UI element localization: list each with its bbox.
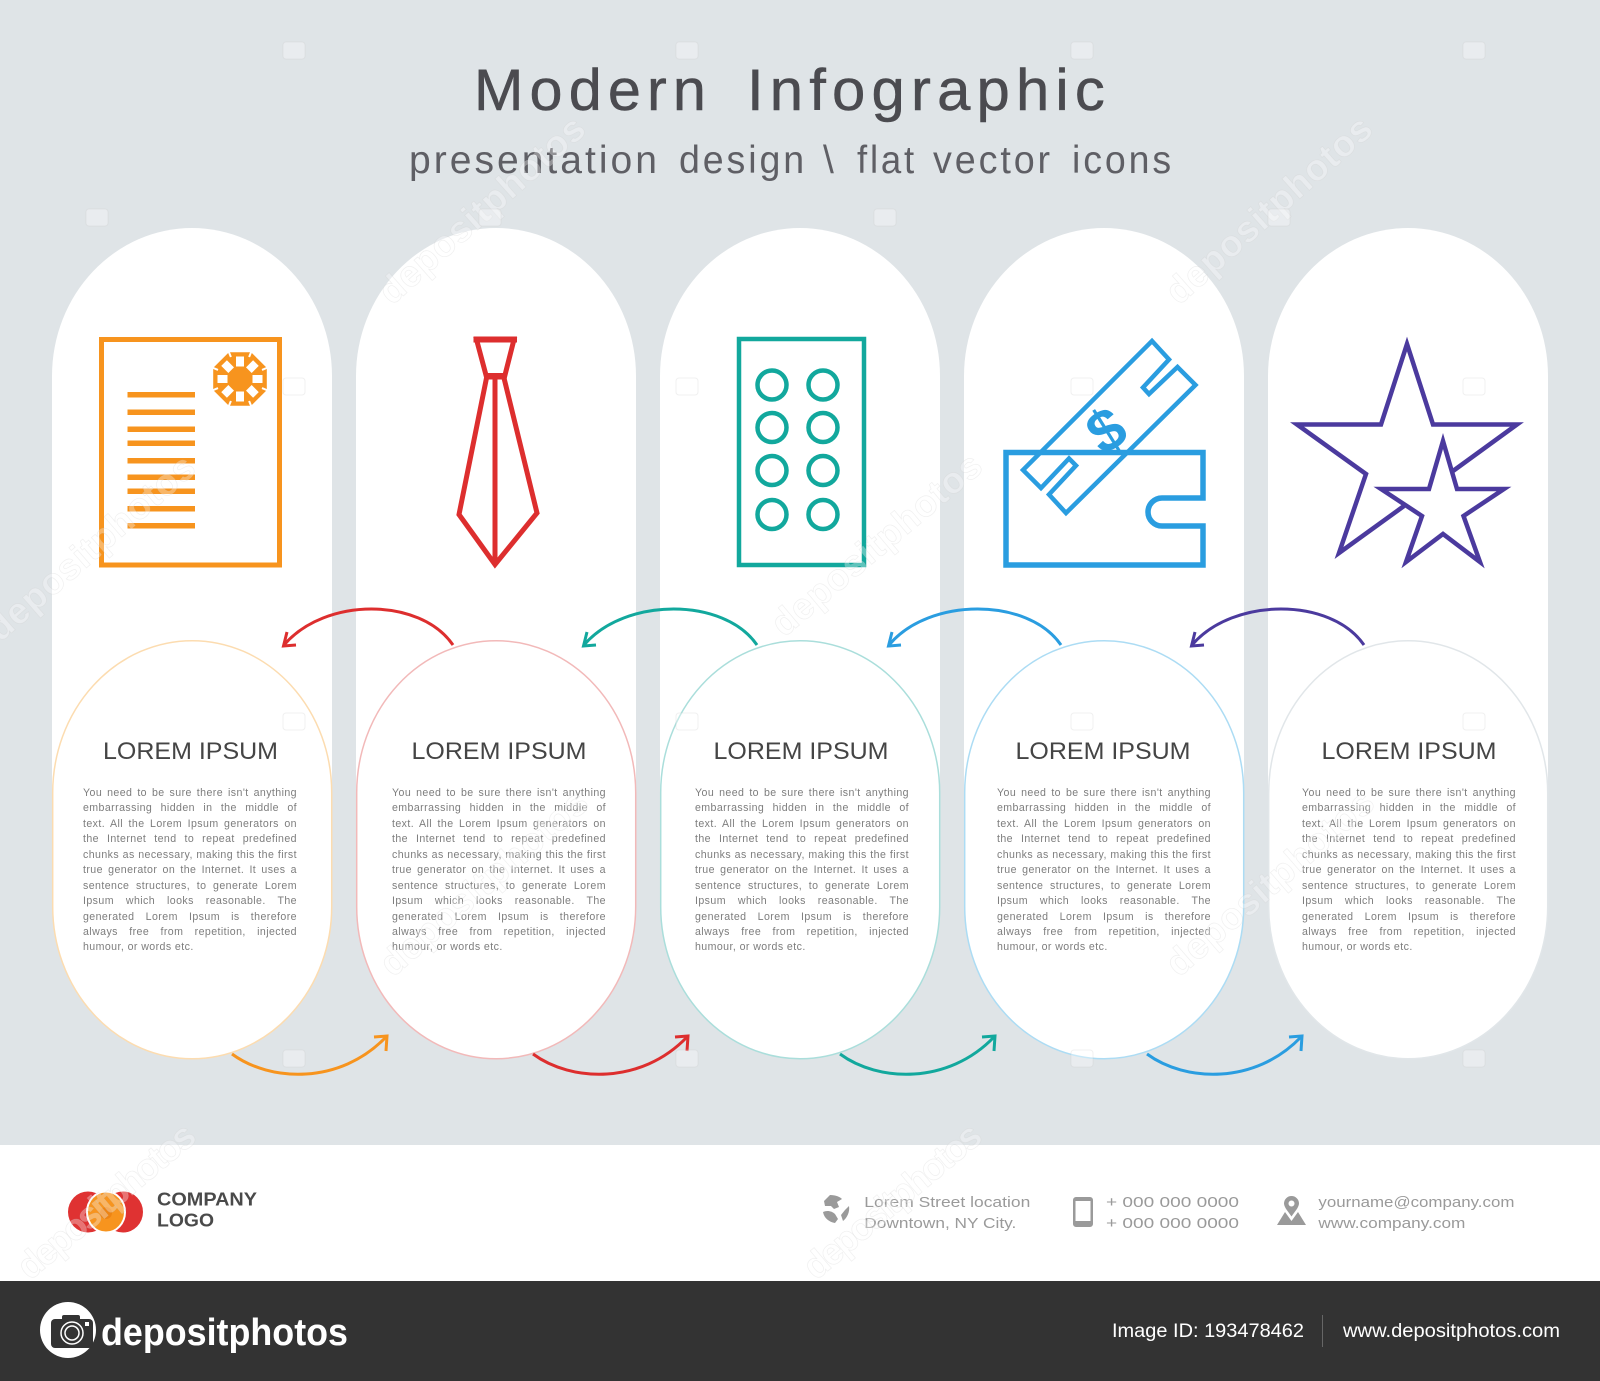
icon: globe [823, 1195, 849, 1223]
heading: column 4: LOREM IPSUM [1016, 738, 1190, 765]
text: column 1: humour, or words etc. [83, 941, 194, 953]
title: Modern [474, 58, 712, 123]
icon: camera logo [40, 1302, 96, 1358]
panel: column 4 [964, 228, 1244, 1059]
arrow: teal back [584, 609, 757, 646]
icon: map pin [1277, 1196, 1306, 1225]
arrow: blue forward [1147, 1036, 1302, 1074]
icon: document with seal [102, 340, 280, 565]
heading: column 1: LOREM IPSUM [103, 738, 278, 765]
text: column 5: generated Lorem Ipsum is therefore [1302, 910, 1516, 922]
text: column 1: generated Lorem Ipsum is therefore [83, 910, 297, 922]
title: Infographic [747, 58, 1111, 123]
text: column 2 [392, 786, 606, 961]
arrow: teal forward [840, 1036, 995, 1074]
text: column 4: generated Lorem Ipsum is therefore [997, 910, 1211, 922]
icon: wallet with banknote [1006, 341, 1203, 565]
text: column 4: You need to be sure there isn't anything [997, 787, 1211, 799]
text: column 2: You need to be sure there isn't anything [392, 787, 606, 799]
heading: column 5: LOREM IPSUM [1322, 738, 1496, 765]
text: column 3: sentence structures, to generate Lorem [695, 880, 909, 892]
address: Lorem Street location [864, 1194, 1030, 1211]
text: column 1: Ipsum which looks reasonable. The [83, 895, 297, 907]
text: column 4: text. All the Lorem Ipsum generators on [997, 818, 1211, 830]
text: column 4: sentence structures, to generate Lorem [997, 880, 1211, 892]
text: depositphotos [795, 1114, 990, 1287]
text: column 3: chunks as necessary, making this the first [695, 849, 909, 861]
arrow: red back [284, 609, 453, 646]
contact [1277, 1194, 1514, 1232]
text: column 1: embarrassing hidden in the middle of [83, 802, 297, 814]
arrow: orange forward [232, 1036, 387, 1074]
image id: Image ID: 193478462 [1112, 1320, 1304, 1342]
panel: column 5 [1268, 228, 1548, 1059]
bottom brand bar [0, 1281, 1600, 1381]
text: column 5: Ipsum which looks reasonable. The [1302, 895, 1516, 907]
panel: column 1 [52, 228, 332, 1059]
phone: + 000 000 0000 [1106, 1194, 1239, 1211]
subtitle: flat [857, 139, 917, 182]
icon: two stars [1297, 344, 1517, 562]
text: depositphotos [371, 781, 596, 984]
text: column 5: always free from repetition, injected [1302, 926, 1516, 938]
subtitle: design [679, 139, 807, 182]
subtitle: vector [933, 139, 1053, 182]
text: column 2: humour, or words etc. [392, 941, 503, 953]
company logo: COMPANY [157, 1190, 257, 1210]
text: column 1: always free from repetition, injected [83, 926, 297, 938]
text: column 5: chunks as necessary, making this the first [1302, 849, 1516, 861]
text: depositphotos [9, 1114, 204, 1287]
text: column 5: the Internet tend to repeat predefined [1302, 833, 1516, 845]
text: column 5: humour, or words etc. [1302, 941, 1413, 953]
text: depositphotos [370, 107, 593, 312]
icon: necktie [459, 340, 537, 564]
text: depositphotos [1157, 107, 1380, 312]
icon: pill blister pack [739, 339, 864, 565]
text: column 3 [695, 786, 909, 961]
phone [1073, 1194, 1239, 1232]
subtitle: icons [1072, 139, 1174, 182]
panel: column 3 [660, 228, 940, 1059]
text: column 4: Ipsum which looks reasonable. The [997, 895, 1211, 907]
text: column 3: generated Lorem Ipsum is therefore [695, 910, 909, 922]
text: column 3: embarrassing hidden in the middle of [695, 802, 909, 814]
text: column 1: the Internet tend to repeat predefined [83, 833, 297, 845]
subtitle: presentation [409, 139, 660, 182]
text: column 3: Ipsum which looks reasonable. The [695, 895, 909, 907]
text: column 4: true generator on the Internet. It uses a [997, 864, 1211, 876]
company logo: LOGO [157, 1211, 214, 1231]
contact: www.company.com [1317, 1215, 1465, 1232]
text: column 2: Ipsum which looks reasonable. The [392, 895, 606, 907]
text: column 4: embarrassing hidden in the middle of [997, 802, 1211, 814]
text: column 4: humour, or words etc. [997, 941, 1108, 953]
text: column 5: You need to be sure there isn't anything [1302, 787, 1516, 799]
text: column 2: always free from repetition, injected [392, 926, 606, 938]
icon: wallet with banknote: $ [1074, 393, 1138, 468]
text: column 1: You need to be sure there isn't anything [83, 787, 297, 799]
subtitle: \ [823, 139, 834, 182]
company logo [68, 1190, 257, 1232]
text: column 4: always free from repetition, injected [997, 926, 1211, 938]
text: column 3: You need to be sure there isn't anything [695, 787, 909, 799]
text: column 2: embarrassing hidden in the middle of [392, 802, 606, 814]
text: column 4: chunks as necessary, making this the first [997, 849, 1211, 861]
footer band [0, 1145, 1600, 1281]
text: column 3: the Internet tend to repeat predefined [695, 833, 909, 845]
text: column 1: chunks as necessary, making this the first [83, 849, 297, 861]
text: column 5: embarrassing hidden in the middle of [1302, 802, 1516, 814]
text: depositphotos [763, 444, 990, 644]
text: column 1: text. All the Lorem Ipsum generators on [83, 818, 297, 830]
address [823, 1194, 1030, 1232]
title [474, 58, 1111, 123]
text: column 5 [1302, 786, 1516, 961]
text: column 3: true generator on the Internet. It uses a [695, 864, 909, 876]
text: column 3: always free from repetition, injected [695, 926, 909, 938]
arrow: blue back [888, 609, 1061, 646]
text: column 2: generated Lorem Ipsum is therefore [392, 910, 606, 922]
text: column 1: true generator on the Internet. It uses a [83, 864, 297, 876]
text: column 5: text. All the Lorem Ipsum generators on [1302, 818, 1516, 830]
text: column 2: the Internet tend to repeat predefined [392, 833, 606, 845]
heading: column 3: LOREM IPSUM [714, 738, 888, 765]
icon: phone [1073, 1197, 1093, 1227]
text: column 3: humour, or words etc. [695, 941, 806, 953]
heading: column 2: LOREM IPSUM [412, 738, 586, 765]
brand wordmark: depositphotos [101, 1312, 348, 1354]
text: column 5: sentence structures, to generate Lorem [1302, 880, 1516, 892]
text: column 5: true generator on the Internet. It uses a [1302, 864, 1516, 876]
text: column 2: sentence structures, to generate Lorem [392, 880, 606, 892]
text: column 4: the Internet tend to repeat predefined [997, 833, 1211, 845]
text: column 2: true generator on the Internet. It uses a [392, 864, 606, 876]
text: column 4 [997, 786, 1211, 961]
arrow: purple back [1192, 609, 1364, 646]
text: column 2: chunks as necessary, making this the first [392, 849, 606, 861]
text: depositphotos [1157, 781, 1382, 984]
website: www.depositphotos.com [1342, 1320, 1560, 1342]
text: column 2: text. All the Lorem Ipsum generators on [392, 818, 606, 830]
panel: column 2 [356, 228, 636, 1059]
subtitle [409, 139, 1174, 182]
text: column 3: text. All the Lorem Ipsum generators on [695, 818, 909, 830]
address: Downtown, NY City. [864, 1215, 1016, 1232]
text: column 1 [83, 786, 297, 961]
phone: + 000 000 0000 [1106, 1215, 1239, 1232]
contact: yourname@company.com [1318, 1194, 1514, 1211]
text: column 1: sentence structures, to generate Lorem [83, 880, 297, 892]
arrow: red forward [533, 1036, 688, 1074]
